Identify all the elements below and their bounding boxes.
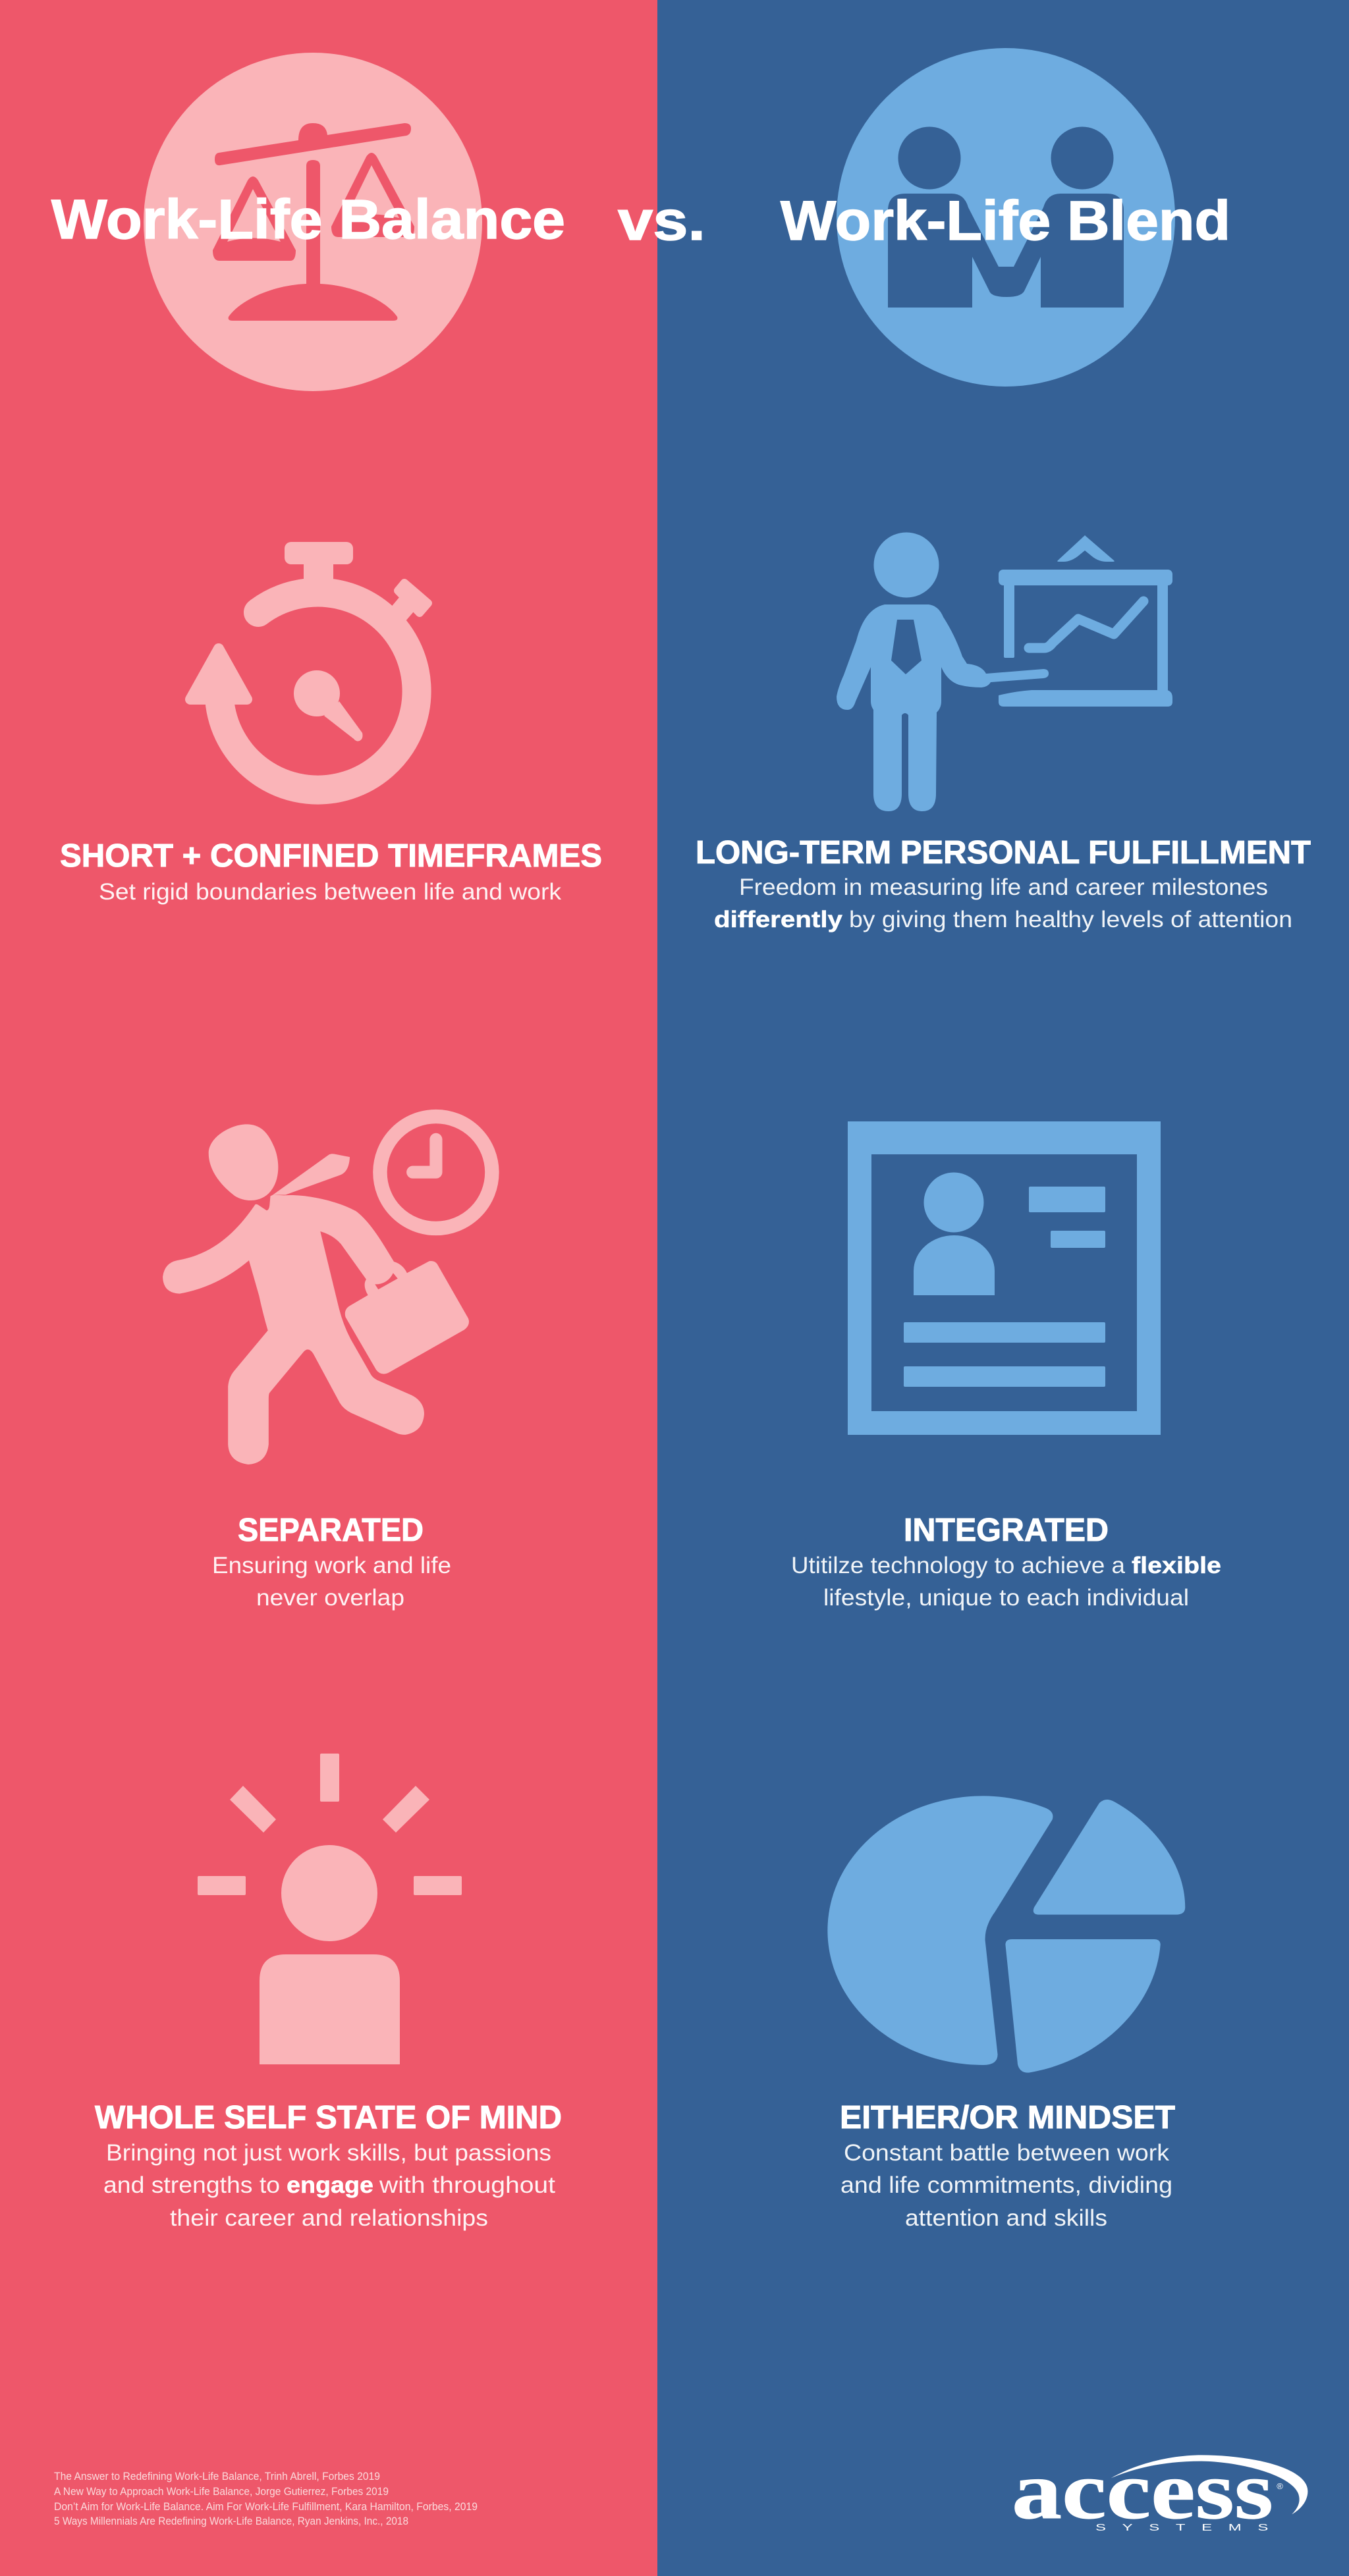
- heading and text: whole self state of mind: [95, 2100, 562, 2231]
- icon: split pie chart: [827, 1796, 1185, 2073]
- logo: access systems: SYSTEMS: [1095, 2522, 1268, 2533]
- panel: work-life balance background: [0, 0, 657, 2576]
- title: work-life blend: Work-Life Blend: [781, 190, 1230, 252]
- heading and text: integrated: Utitilze technology to achieve a: [791, 1553, 1126, 1578]
- icon: running businessman with clock: [163, 1117, 492, 1464]
- heading and text: either or mindset: Constant battle between work: [844, 2140, 1170, 2166]
- heading and text: separated: never overlap: [256, 1585, 404, 1611]
- title: versus: vs.: [618, 190, 705, 252]
- heading and text: whole self state of mind: engage: [287, 2172, 373, 2198]
- sources text block: A New Way to Approach Work-Life Balance, Jorge Gutierrez, Forbes 2019: [54, 2485, 389, 2498]
- icon: two people shaking hands in circle: [837, 48, 1175, 387]
- logo: access systems: ®: [1277, 2481, 1283, 2491]
- heading and text: long-term personal fulfillment: LONG-TERM PERSONAL FULFILLMENT: [696, 835, 1311, 871]
- logo: access systems: access: [1012, 2446, 1273, 2536]
- heading and text: short confined timeframes: SHORT + CONFINED TIMEFRAMES: [60, 838, 602, 874]
- heading and text: separated: Ensuring work and life: [212, 1553, 451, 1578]
- icon: presenter with chart board: [837, 532, 1172, 811]
- heading and text: separated: [212, 1513, 451, 1611]
- heading and text: either or mindset: and life commitments, dividing: [840, 2172, 1172, 2198]
- heading and text: whole self state of mind: and strengths to: [103, 2172, 280, 2198]
- heading and text: separated: SEPARATED: [238, 1513, 424, 1548]
- heading and text: integrated: flexible: [1132, 1553, 1221, 1578]
- heading and text: integrated: [791, 1513, 1221, 1611]
- heading and text: integrated: INTEGRATED: [904, 1513, 1109, 1548]
- sources text block: The Answer to Redefining Work-Life Balance, Trinh Abrell, Forbes 2019: [54, 2470, 380, 2482]
- heading and text: whole self state of mind: their career and relationships: [170, 2205, 488, 2231]
- heading and text: whole self state of mind: Bringing not just work skills, but passions: [106, 2140, 551, 2166]
- sources text block: [54, 2470, 478, 2527]
- heading and text: long-term personal fulfillment: by giving them healthy levels of attention: [849, 907, 1292, 932]
- heading and text: long-term personal fulfillment: Freedom in measuring life and career milestones: [739, 874, 1268, 900]
- heading and text: either or mindset: [840, 2100, 1175, 2231]
- panel: work-life blend background: [657, 0, 1349, 2576]
- heading and text: either or mindset: EITHER/OR MINDSET: [840, 2100, 1175, 2135]
- heading and text: short confined timeframes: [60, 838, 602, 905]
- icon: person with radiating rays: [198, 1754, 462, 2064]
- heading and text: either or mindset: attention and skills: [905, 2205, 1107, 2231]
- heading and text: integrated: lifestyle, unique to each individual: [823, 1585, 1189, 1611]
- sources text block: 5 Ways Millennials Are Redefining Work-Life Balance, Ryan Jenkins, Inc., 2018: [54, 2515, 408, 2527]
- heading and text: whole self state of mind: WHOLE SELF STATE OF MIND: [95, 2100, 562, 2135]
- heading and text: whole self state of mind: with throughout: [379, 2172, 555, 2198]
- icon: profile document: [848, 1121, 1161, 1435]
- heading and text: long-term personal fulfillment: [696, 835, 1311, 932]
- title: work-life balance: Work-Life Balance: [51, 188, 565, 250]
- heading and text: long-term personal fulfillment: differently: [714, 907, 843, 932]
- sources text block: Don’t Aim for Work-Life Balance. Aim For Work-Life Fulfillment, Kara Hamilton, Forbes, 2019: [54, 2500, 478, 2513]
- heading and text: short confined timeframes: Set rigid boundaries between life and work: [99, 879, 562, 905]
- icon: balance scale in circle: [144, 53, 482, 391]
- icon: stopwatch with arrow: [190, 542, 428, 790]
